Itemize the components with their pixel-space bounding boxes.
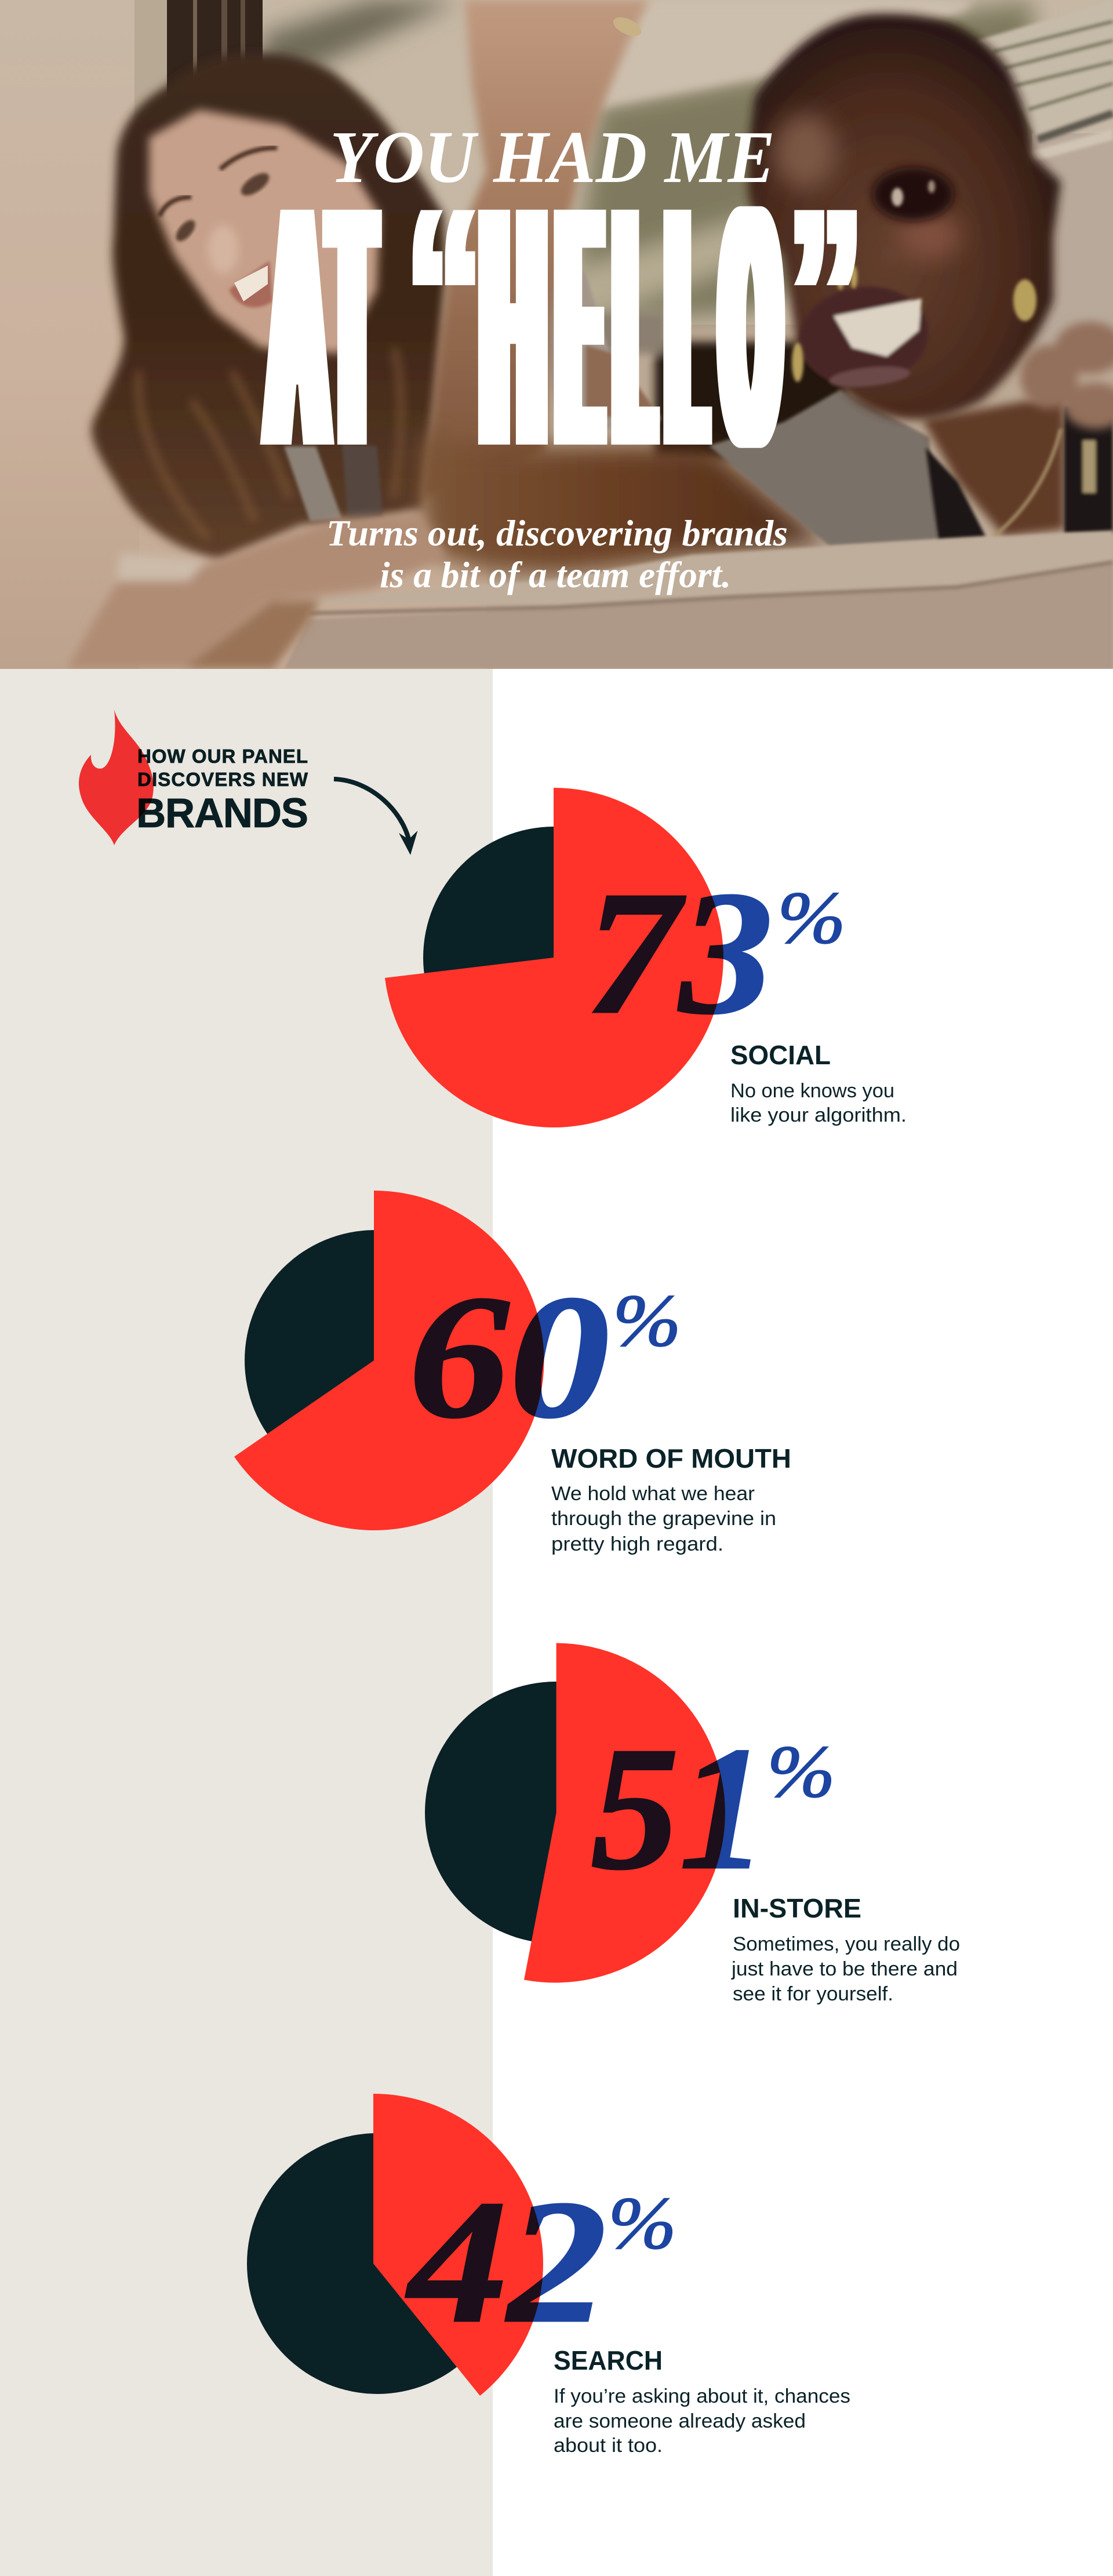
label: in-store: see it for yourself.	[733, 1983, 893, 2005]
number: 42%: 42	[406, 2163, 607, 2359]
hero heading: at "hello": L	[670, 136, 704, 517]
number: 51%: 51	[591, 1710, 768, 1906]
dark clothing straps	[926, 406, 1113, 539]
hero heading: at "hello": O	[723, 136, 779, 517]
number: 73%: 73	[585, 854, 773, 1050]
ceiling vents	[977, 0, 1113, 157]
label: search: If you’re asking about it, chances	[554, 2385, 850, 2407]
hero subtitle: Turns out, discovering brands	[326, 512, 788, 554]
woman with shaved head	[709, 14, 1113, 546]
hero heading: at "hello": “	[405, 152, 483, 450]
section heading: how our panel discovers new brands: DISCOVERS NEW	[137, 769, 308, 790]
label: in-store: just have to be there and	[731, 1958, 958, 1980]
arrow: points to first chart	[334, 779, 417, 855]
hero heading: at "hello"	[260, 136, 864, 517]
hero heading: at "hello": A	[268, 136, 327, 517]
label: search	[554, 2345, 850, 2457]
number: 42%	[406, 2163, 676, 2359]
chart: in-store 51%	[425, 1643, 725, 1982]
hero heading: at "hello": E	[559, 136, 600, 517]
label: social: No one knows you	[730, 1080, 894, 1102]
number: 60%: 60	[409, 1258, 610, 1454]
hero heading: at "hello": T	[332, 136, 373, 517]
white t-shirt shoulder	[548, 255, 661, 429]
sleeve cuff	[117, 553, 206, 581]
label: in-store: IN-STORE	[733, 1893, 861, 1923]
label: word of mouth: WORD OF MOUTH	[551, 1443, 791, 1473]
head	[748, 14, 1061, 420]
label: search: are someone already asked	[554, 2410, 806, 2432]
woman with long hair	[92, 53, 446, 559]
number: 73%	[585, 854, 846, 1050]
label: social: SOCIAL	[730, 1040, 831, 1070]
label: search: SEARCH	[554, 2345, 663, 2375]
panel: beige left column	[0, 669, 493, 2576]
label: social: like your algorithm.	[730, 1104, 907, 1126]
horizontal upper arm	[420, 429, 826, 574]
raised arm and hand	[423, 0, 649, 499]
hero photo: two women leaning out of a window	[0, 0, 1113, 669]
window ledge	[284, 530, 1113, 669]
hero heading: at "hello": H	[482, 136, 544, 517]
section heading: how our panel discovers new brands: HOW OUR PANEL	[137, 745, 308, 767]
label: social	[730, 1040, 907, 1126]
blurred hand at right edge	[1020, 322, 1113, 429]
hero heading: at "hello": ”	[787, 152, 864, 450]
eye	[872, 168, 954, 221]
chart: word of mouth 60%	[234, 1191, 544, 1530]
hero subtitle	[326, 512, 788, 595]
hero heading: you had me: YOU HAD ME	[330, 116, 775, 198]
number: 73%: %	[777, 876, 846, 959]
number: 51%: %	[767, 1730, 835, 1813]
icon: red flame	[79, 710, 154, 845]
hero subtitle: is a bit of a team effort.	[380, 554, 731, 595]
hero heading: at "hello": L	[617, 136, 652, 517]
woman's face	[149, 110, 380, 354]
label: word of mouth: pretty high regard.	[551, 1533, 723, 1555]
number: 60%: %	[613, 1279, 681, 1362]
chart: social 73%	[385, 788, 723, 1127]
woman's forearms and hand	[67, 514, 447, 669]
number: 60%	[409, 1258, 681, 1454]
label: in-store	[731, 1893, 960, 2005]
section heading: how our panel discovers new brands	[136, 745, 308, 836]
label: word of mouth	[551, 1443, 791, 1555]
section heading: how our panel discovers new brands: BRANDS	[136, 791, 308, 836]
photo background	[0, 0, 1113, 669]
label: word of mouth: We hold what we hear	[551, 1483, 755, 1505]
ring	[610, 13, 644, 40]
number: 42%: %	[608, 2182, 676, 2264]
necklace	[994, 429, 1061, 536]
smile	[792, 278, 935, 394]
label: search: about it too.	[554, 2435, 663, 2457]
gray shirt	[709, 390, 938, 546]
window frame	[167, 0, 263, 110]
interior shadow between the women	[585, 313, 846, 458]
gold nose ring and earrings	[792, 265, 1036, 382]
label: in-store: Sometimes, you really do	[733, 1933, 960, 1955]
chart: search 42%	[247, 2094, 543, 2396]
neck and chest	[922, 394, 1064, 536]
label: word of mouth: through the grapevine in	[551, 1508, 776, 1530]
